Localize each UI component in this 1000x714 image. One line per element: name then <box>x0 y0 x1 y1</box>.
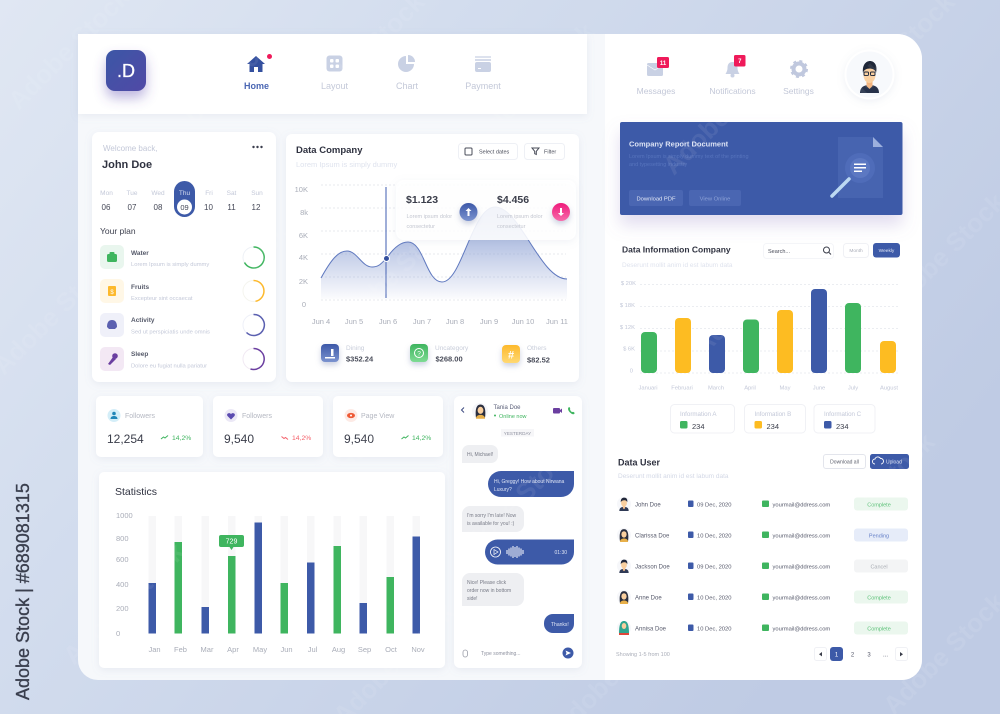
notifications icon <box>709 55 756 96</box>
area chart: Jun 10 <box>512 317 534 326</box>
stat card: page view <box>333 396 443 457</box>
row: john doe: yourmail@ddress.com <box>772 502 830 508</box>
pagination: 1 <box>835 652 839 658</box>
bar chart: Aug <box>332 645 345 654</box>
bar chart: May <box>780 386 791 392</box>
calendar strip: 09 <box>180 203 189 212</box>
row: jackson doe: Jackson Doe <box>635 564 670 570</box>
callout: values: $4.456 <box>497 194 529 206</box>
greeting <box>102 144 158 171</box>
legend: information b: 234 <box>766 422 779 431</box>
row: anne doe <box>617 590 908 604</box>
greeting: John Doe <box>102 159 152 171</box>
stat: others: $82.52 <box>527 356 550 364</box>
bar chart: 400 <box>116 580 129 589</box>
row: clarissa doe: Pending <box>869 534 889 540</box>
nav item: layout: Layout <box>321 81 349 91</box>
legend: information b <box>744 404 806 433</box>
legend: information a: Information A <box>680 411 717 418</box>
button: download all: Download all <box>830 460 859 466</box>
bar chart: Mar <box>201 645 214 654</box>
area chart: Jun 11 <box>546 317 568 326</box>
right column panel <box>605 34 922 680</box>
bar chart: Feb <box>174 645 187 654</box>
stock watermark: Adobe Stock <box>267 406 401 540</box>
calendar strip: Fri <box>205 190 213 197</box>
illustration: document and magnifier <box>832 137 883 198</box>
stock watermark: Adobe Stock <box>162 216 296 350</box>
bar chart: April <box>744 386 756 392</box>
stat card: followers 2: Followers <box>242 413 272 420</box>
icon: down arrow <box>552 203 570 221</box>
chat header: Online now <box>499 414 527 420</box>
button: filter: Filter <box>544 150 556 156</box>
callout: values: Lorem ipsum dolor <box>497 214 543 220</box>
calendar strip: Sat <box>227 190 237 197</box>
row: clarissa doe: 10 Dec, 2020 <box>697 534 731 540</box>
row: annisa doe: Annisa Doe <box>635 626 667 632</box>
calendar strip: Thu <box>179 190 190 197</box>
message: how about <box>488 471 574 497</box>
row: annisa doe: 10 Dec, 2020 <box>697 626 731 632</box>
row: jackson doe: 09 Dec, 2020 <box>697 564 731 570</box>
calendar strip: 11 <box>227 203 236 212</box>
button: select dates <box>458 144 518 160</box>
icon: up arrow <box>460 203 478 221</box>
message: thanks <box>544 614 574 633</box>
stock watermark: Adobe Stock <box>627 446 761 580</box>
row: annisa doe: yourmail@ddress.com <box>772 626 830 632</box>
plan item: activity <box>100 313 264 337</box>
legend: information b: Information B <box>754 411 791 418</box>
button: download pdf: Download PDF <box>636 196 676 202</box>
date label: YESTERDAY <box>504 431 531 436</box>
bar chart: March <box>708 386 724 392</box>
area chart: Jun 4 <box>312 317 330 326</box>
report banner: and typesetting industry <box>629 162 687 168</box>
area chart: Jun 6 <box>379 317 397 326</box>
plan item: fruits: Excepteur sint occaecat <box>131 296 193 302</box>
row: john doe: John Doe <box>635 502 661 508</box>
row: anne doe: 10 Dec, 2020 <box>697 596 731 602</box>
pagination: 2 <box>851 652 855 658</box>
button: select dates: Select dates <box>479 150 510 156</box>
bar chart: August <box>880 386 898 392</box>
bar chart: Februari <box>671 386 693 392</box>
bar chart: 0 <box>630 368 633 374</box>
row: john doe: Complete <box>867 502 891 508</box>
bar chart: 0 <box>116 629 120 638</box>
bar chart: 200 <box>116 604 129 613</box>
plan item: activity: Sed ut perspiciatis unde omnis <box>131 330 210 336</box>
area chart: Jun 7 <box>413 317 431 326</box>
plan item: water: Water <box>131 250 149 257</box>
stat card: followers 2: 9,540 <box>224 432 254 446</box>
row: annisa doe <box>617 621 908 635</box>
stat card: followers 2: 14,2% <box>292 435 311 442</box>
area chart: Jun 5 <box>345 317 363 326</box>
plan item: sleep: Sleep <box>131 351 148 358</box>
dashboard frame <box>78 34 922 680</box>
message: nice <box>462 573 524 606</box>
message: sorry <box>462 506 524 532</box>
report banner <box>620 122 902 215</box>
row: anne doe: Complete <box>867 596 891 602</box>
button: view online <box>689 190 741 206</box>
legend: information c: Information C <box>824 411 862 418</box>
heading: Data User <box>618 458 661 468</box>
row: annisa doe: Complete <box>867 626 891 632</box>
profile avatar <box>846 50 894 98</box>
row: clarissa doe: Clarissa Doe <box>635 534 670 540</box>
area chart: Jun 9 <box>480 317 498 326</box>
stat: dining <box>321 344 374 364</box>
stat: dining: Dining <box>346 345 365 352</box>
logo: .D <box>117 61 135 81</box>
calendar strip: Sun <box>251 190 263 197</box>
message: sorry: is available for you! :) <box>467 521 515 527</box>
message: nice: order now in bottom <box>467 588 511 594</box>
callout: values: $1.123 <box>406 194 438 206</box>
calendar strip: 08 <box>154 203 163 212</box>
tooltip: 729 <box>219 535 244 550</box>
area chart: 8k <box>300 208 308 217</box>
pagination: ... <box>883 652 888 658</box>
panel: welcome and plan <box>92 132 276 382</box>
report banner: Company Report Document <box>629 140 729 148</box>
button: download all <box>824 454 866 468</box>
pagination summary: Showing 1-5 from 100 <box>616 652 670 658</box>
stock watermark: Adobe Stock <box>447 436 581 570</box>
stat: dining: $352.24 <box>346 354 374 364</box>
plan item: water: Lorem Ipsum is simply dummy <box>131 262 209 268</box>
heading: Statistics <box>115 486 157 498</box>
callout: values: Lorem ipsum dolor <box>406 214 452 220</box>
stat card: page view: Page View <box>361 413 395 420</box>
stat: uncategory <box>410 344 469 364</box>
plan item: fruits: $ <box>110 290 114 296</box>
stat: uncategory: ? <box>417 350 421 358</box>
stat: others: # <box>508 350 514 362</box>
calendar strip: 07 <box>128 203 137 212</box>
heading: Deserunt mollit anim id est labum data <box>622 262 733 269</box>
logo <box>106 50 146 91</box>
button: download pdf <box>629 190 683 206</box>
tooltip: 729: 729 <box>226 538 237 546</box>
message input: Type something... <box>481 651 520 657</box>
panel: data user <box>616 454 909 661</box>
heading <box>618 458 729 480</box>
calendar strip: 12 <box>252 203 261 212</box>
bar chart <box>620 281 898 392</box>
date label <box>501 429 534 436</box>
nav item: payment: Payment <box>465 81 501 91</box>
search box: Search... <box>768 249 790 255</box>
callout: values: consectetur <box>406 224 435 230</box>
plan item: sleep <box>100 347 264 371</box>
area chart: 0 <box>302 300 306 309</box>
stock watermark: Adobe Stock <box>687 226 821 360</box>
bar chart: $ 18K <box>620 303 635 309</box>
row: jackson doe <box>617 559 908 573</box>
calendar strip: Tue <box>127 190 138 197</box>
calendar strip: 10 <box>204 203 213 212</box>
nav item: chart <box>396 55 418 91</box>
heading <box>622 244 733 269</box>
heading: Data Company <box>296 145 363 156</box>
nav item: home: Home <box>244 81 269 91</box>
area chart <box>295 185 568 326</box>
more menu icon <box>252 146 263 148</box>
stock watermark: Adobe Stock <box>507 226 641 360</box>
toggle: weekly: Weekly <box>879 248 895 254</box>
top navigation bar <box>78 34 587 114</box>
stock watermark: Adobe Stock <box>57 536 191 670</box>
chat header <box>462 403 575 420</box>
stat: uncategory: $268.00 <box>436 354 463 364</box>
bar chart: Januari <box>638 386 658 392</box>
area chart: 4K <box>299 253 308 262</box>
calendar strip: 06 <box>102 203 111 212</box>
nav item: chart: Chart <box>396 81 418 91</box>
calendar strip: Mon <box>100 190 113 197</box>
stat card: followers: 14,2% <box>172 435 191 442</box>
toggle: month <box>844 244 868 258</box>
message: how about: Hi, Greggy! How about Nirwana <box>494 479 565 485</box>
message: hi michael <box>462 445 498 463</box>
toggle: weekly <box>873 243 900 258</box>
stat: others: Others <box>527 345 547 352</box>
heading: Deserunt mollit anim id est labum data <box>618 473 729 480</box>
legend: information a: 234 <box>692 422 705 431</box>
panel: statistics <box>99 472 445 668</box>
button: upload <box>870 454 909 469</box>
bar chart: Jul <box>308 645 318 654</box>
bar chart: Nov <box>411 645 425 654</box>
row: clarissa doe <box>617 528 908 542</box>
plan item: sleep: Dolore eu fugiat nulla pariatur <box>131 364 207 370</box>
nav item: layout <box>321 56 349 91</box>
stat card: followers: 12,254 <box>107 432 144 446</box>
bar chart: Sep <box>358 645 371 654</box>
message: how about: Luxury? <box>494 487 512 493</box>
messages icon <box>637 57 675 96</box>
button: filter <box>524 144 564 160</box>
bar chart: $ 6K <box>623 346 635 352</box>
callout: values <box>396 180 576 240</box>
stock watermark: Adobe Stock <box>657 46 791 180</box>
bar chart: 600 <box>116 555 129 564</box>
panel: data company <box>286 134 579 382</box>
heading <box>296 145 398 169</box>
bar chart: Apr <box>227 645 239 654</box>
panel: chat <box>454 396 582 668</box>
panel: data information company <box>620 243 900 433</box>
bar chart: 1000 <box>116 511 133 520</box>
stat card: followers <box>96 396 203 457</box>
search box <box>764 244 834 258</box>
message: nice: side! <box>467 596 478 602</box>
calendar strip <box>100 181 263 217</box>
message input <box>463 648 574 658</box>
heading: your plan: Your plan <box>100 226 136 236</box>
stat: uncategory: Uncategory <box>435 345 469 352</box>
area chart: 10K <box>295 185 308 194</box>
stat card: page view: 9,540 <box>344 432 374 446</box>
audio message: 01:30 <box>554 550 567 556</box>
bar chart: July <box>848 386 858 392</box>
row: anne doe: Anne Doe <box>635 596 662 602</box>
button: upload: Upload <box>886 460 902 466</box>
calendar strip: Wed <box>151 190 165 197</box>
bar chart <box>116 511 425 654</box>
legend: information c: 234 <box>836 422 849 431</box>
bar chart: Oct <box>385 645 398 654</box>
heading: Data Information Company <box>622 244 731 254</box>
legend: information a <box>670 404 734 433</box>
stat card: page view: 14,2% <box>412 435 431 442</box>
stock watermark: Adobe Stock <box>327 206 461 340</box>
audio message <box>485 540 574 564</box>
greeting: Welcome back, <box>103 144 158 153</box>
settings icon <box>783 61 814 96</box>
heading: Lorem Ipsum is simply dummy <box>296 160 398 169</box>
callout: values: consectetur <box>497 224 526 230</box>
bar chart: 800 <box>116 534 129 543</box>
bar chart: Jun <box>280 645 293 654</box>
notifications icon: Notifications <box>709 86 756 96</box>
bar chart: June <box>813 386 825 392</box>
toggle: month: Month <box>849 248 863 254</box>
bar chart: Jan <box>148 645 161 654</box>
pagination: 3 <box>867 652 871 658</box>
stock watermark: Adobe Stock <box>467 16 601 150</box>
stock credit: Adobe Stock | #689081315 <box>13 483 33 700</box>
messages icon: Messages <box>637 86 675 96</box>
stat: others <box>502 345 550 364</box>
legend: information c <box>814 404 875 433</box>
settings icon: Settings <box>783 86 814 96</box>
plan item: activity: Activity <box>131 317 155 324</box>
message: sorry: I'm sorry I'm late! Now <box>467 513 517 519</box>
nav item: home <box>244 54 272 91</box>
stat card: followers: Followers <box>125 413 155 420</box>
message: hi michael: Hi, Michael! <box>467 452 493 458</box>
plan item: fruits: Fruits <box>131 284 149 291</box>
bar chart: $ 20K <box>621 281 636 287</box>
report banner: Lorem Ipsum is simply dummy text of the printing <box>629 154 749 160</box>
row: jackson doe: Cancel <box>870 564 888 570</box>
chat header: Tania Doe <box>494 405 521 411</box>
row: anne doe: yourmail@ddress.com <box>772 596 830 602</box>
stock watermark: Adobe Stock <box>807 426 941 560</box>
row: john doe: 09 Dec, 2020 <box>697 502 731 508</box>
stock watermark: Adobe Stock <box>142 31 276 165</box>
stat card: followers 2 <box>213 396 323 457</box>
bar chart: May <box>253 645 267 654</box>
row: jackson doe: yourmail@ddress.com <box>772 564 830 570</box>
message: nice: Nice! Please click <box>467 580 507 586</box>
row: john doe <box>617 497 908 511</box>
area chart: 6K <box>299 231 308 240</box>
notifications icon: 7 <box>738 59 742 65</box>
nav item: payment <box>465 56 501 91</box>
plan item: water <box>100 245 264 269</box>
message: thanks: Thanks! <box>551 622 569 628</box>
pagination <box>814 647 908 661</box>
area chart: Jun 8 <box>446 317 464 326</box>
area chart: 2K <box>299 277 308 286</box>
row: clarissa doe: yourmail@ddress.com <box>772 534 830 540</box>
button: view online: View Online <box>700 196 730 202</box>
plan item: fruits <box>100 279 264 303</box>
messages icon: 11 <box>660 61 667 67</box>
bar chart: $ 12K <box>620 325 635 331</box>
